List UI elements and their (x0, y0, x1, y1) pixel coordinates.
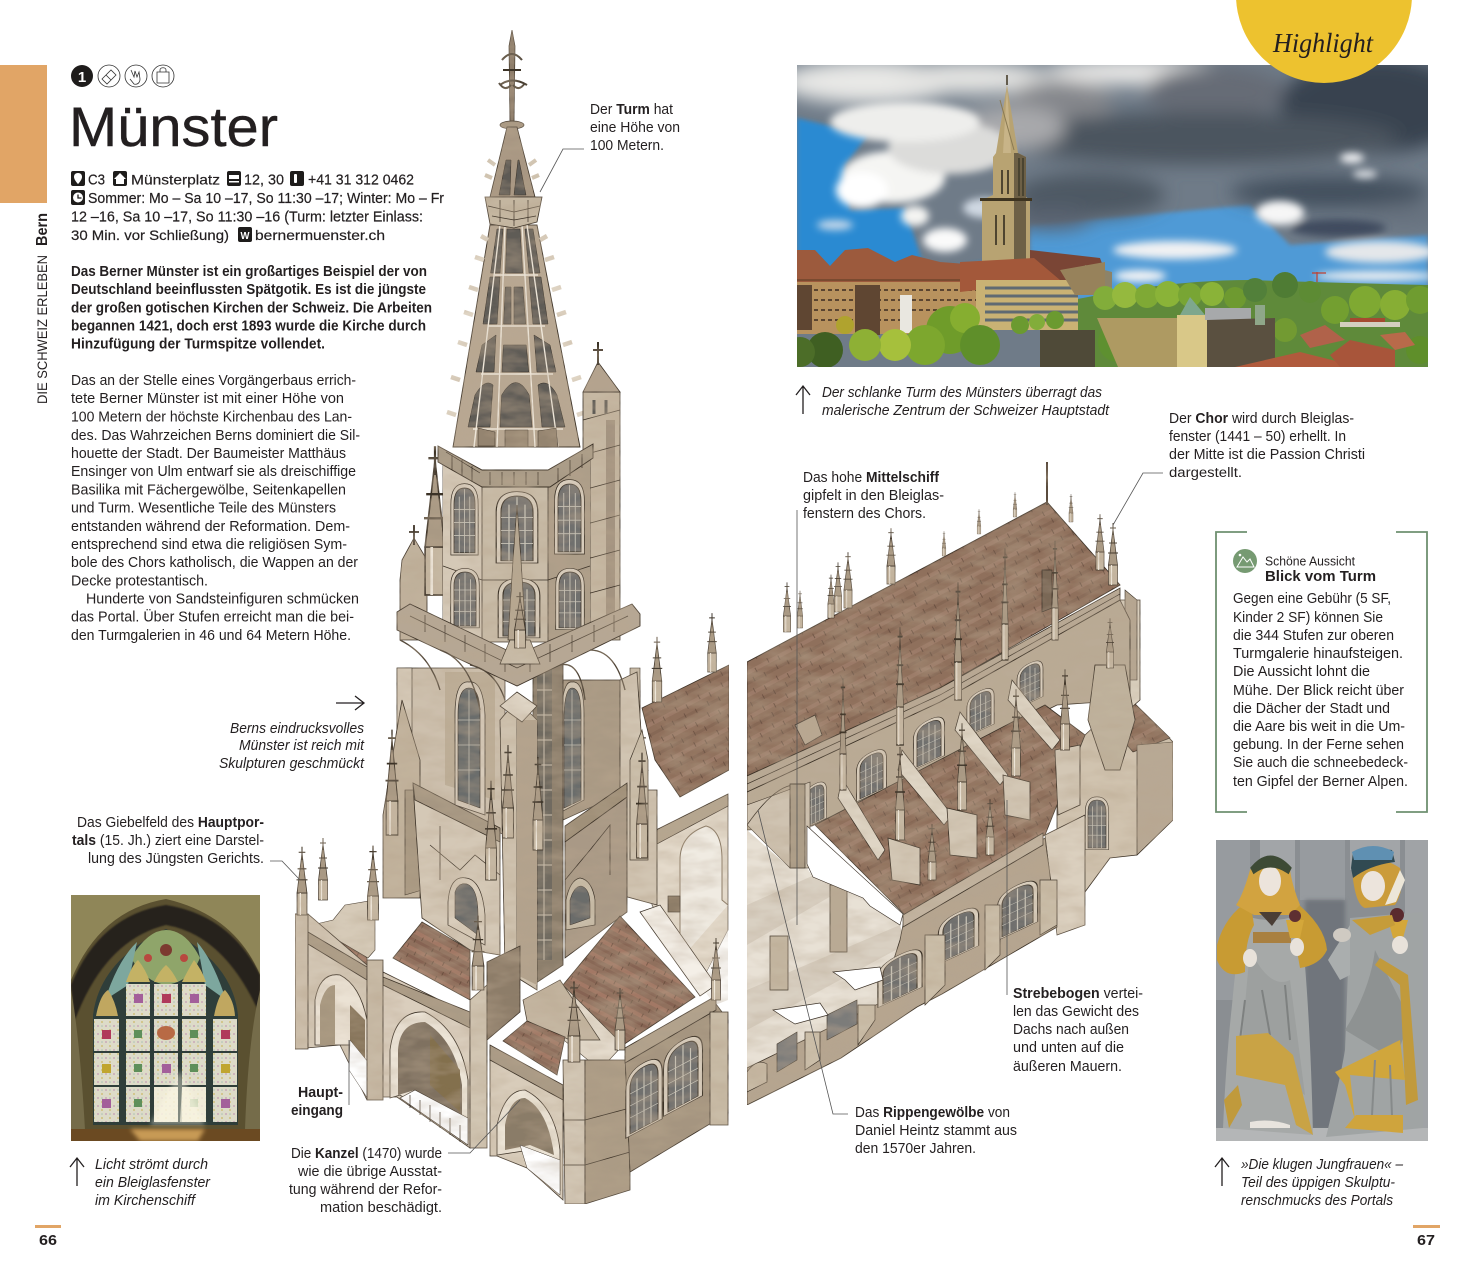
illustration: west tower (295, 30, 729, 1204)
box: view from the tower: die Aare bis weit in die Um- (1233, 719, 1405, 735)
body text: 100 Metern der höchste Kirchenbau des Lan- (71, 410, 352, 426)
label: flying buttresses (1007, 800, 1143, 1075)
flying buttresses and pinnacles (838, 514, 1135, 885)
label: choir: der Mitte ist die Passion Christi (1169, 447, 1365, 463)
interior floor (747, 782, 905, 1075)
body text: Basilika mit Fächergewölbe, Seitenkapellen (71, 482, 346, 498)
photo: stained glass window (71, 895, 260, 1141)
caption: statues: »Die klugen Jungfrauen« – (1241, 1157, 1404, 1173)
body text: houette der Stadt. Der Baumeister Matthäus (71, 446, 346, 462)
body text: tete Berner Münster ist mit einer Höhe von (71, 391, 344, 407)
gallery two (397, 592, 640, 710)
hills and trees (1050, 280, 1428, 367)
clerestory windows (804, 657, 1043, 828)
label: ribbed vault (758, 810, 1017, 1157)
far left bay (295, 914, 395, 1100)
practical information: +41 31 312 0462 (308, 172, 414, 188)
caption: stained glass: im Kirchenschiff (95, 1193, 197, 1209)
label: pulpit: mation beschädigt. (320, 1200, 442, 1216)
caption: stained glass (70, 1157, 211, 1209)
label: ribbed vault: den 1570er Jahren. (855, 1141, 976, 1157)
label: tower height: eine Höhe von (590, 120, 680, 136)
roofs of the porch (312, 900, 716, 1075)
page number right: 67 (1417, 1232, 1435, 1249)
nave roof (747, 462, 1120, 792)
box: view from the tower: Turmgalerie hinaufsteigen. (1233, 646, 1403, 662)
box: view from the tower: Schöne Aussicht (1265, 554, 1355, 568)
caption: statues: renschmucks des Portals (1241, 1193, 1393, 1209)
box: view from the tower (1216, 532, 1427, 812)
caption: stained glass: ein Bleiglasfenster (95, 1175, 211, 1191)
white cut through aisle vault (807, 826, 903, 925)
old town buildings (797, 248, 1105, 335)
practical information: bernermuenster.ch (255, 227, 385, 243)
body text: entstanden während der Reformation. Dem- (71, 519, 350, 535)
label: pulpit: tung während der Refor- (289, 1182, 442, 1198)
label: main entrance: eingang (291, 1103, 343, 1119)
box: view from the tower: Sie auch die schneebedeck- (1233, 755, 1408, 771)
label: pulpit (289, 1100, 520, 1216)
rating and category icons (71, 65, 174, 87)
label: choir: fenster (1441 – 50) erhellt. In (1169, 429, 1346, 445)
box: view from the tower: die Dächer der Stadt und (1233, 701, 1390, 717)
box: view from the tower: ten Gipfel der Berner Alpen. (1233, 774, 1408, 790)
caption: statues: Teil des üppigen Skulptu- (1241, 1175, 1395, 1191)
body text: den Turmgalerien in 46 und 64 Metern Höhe. (71, 628, 351, 644)
illustration: nave (747, 462, 1173, 1105)
practical information: 12, 30 (244, 172, 284, 188)
choir-side wall (625, 938, 728, 1172)
east chapel (1045, 590, 1173, 935)
page number right (1413, 1225, 1440, 1249)
caption: sculptures: Skulpturen geschmückt (219, 756, 365, 772)
clerestory wall (747, 600, 1130, 830)
caption: stained glass: Licht strömt durch (95, 1157, 208, 1173)
finial (499, 30, 527, 129)
intro paragraph: Deutschland beeinflussten Spätgotik. Es ist die jüngste (71, 282, 426, 298)
label: flying buttresses: äußeren Mauern. (1013, 1059, 1122, 1075)
practical information: W (240, 231, 250, 242)
stair turret (583, 342, 620, 640)
lower tower faces (413, 783, 627, 958)
gallery one (438, 444, 593, 487)
label: choir (1113, 411, 1365, 525)
label: flying buttresses: Dachs nach außen (1013, 1022, 1129, 1038)
cathedral tower (980, 75, 1032, 262)
window tracery (93, 929, 238, 1125)
highlight badge (1236, 0, 1412, 83)
sky blue patches (797, 118, 1428, 300)
sidebar vertical label: DIE SCHWEIZ ERLEBEN (34, 255, 50, 404)
box: view from the tower: Kinder 2 SF) können Sie (1233, 610, 1383, 626)
label: pulpit: Die Kanzel (1470) wurde (291, 1146, 442, 1162)
caption: skyline: Der schlanke Turm des Münsters überragt das (822, 385, 1102, 401)
label: tower height: 100 Metern. (590, 138, 664, 154)
intro paragraph: Hinzufügung der Turmspitze vollendet. (71, 336, 325, 352)
label: tower height: Der Turm hat (590, 102, 673, 118)
body text (71, 373, 360, 644)
caption: sculptures (219, 696, 365, 772)
practical information: 12 –16, Sa 10 –17, So 11:30 –16 (Turm: letzter Einlass: (71, 210, 423, 226)
aisle roof (815, 705, 1085, 915)
label: high nave: fenstern des Chors. (803, 506, 926, 522)
caption: sculptures: Münster ist reich mit (239, 738, 365, 754)
intro paragraph: Das Berner Münster ist ein großartiges Beispiel der von (71, 264, 427, 280)
label: flying buttresses: Strebebogen vertei- (1013, 986, 1143, 1002)
title: Münster (69, 95, 278, 158)
label: main entrance: Haupt- (298, 1085, 343, 1101)
octagon storey (443, 458, 590, 642)
clouds (780, 57, 1470, 230)
label: tower height (540, 102, 680, 192)
body text: Ensinger von Ulm entwarf sie als dreischiffige (71, 464, 356, 480)
outer aisle wall (747, 797, 1109, 1105)
trees (785, 272, 1434, 368)
label: main portal tympanum: tals (15. Jh.) ziert eine Darstel- (72, 833, 264, 849)
label: pulpit: wie die übrige Ausstat- (297, 1164, 442, 1180)
label: high nave: Das hohe Mittelschiff (803, 470, 939, 486)
intro paragraph: der großen gotischen Kirchen der Schweiz. Die Arbeiten (71, 300, 432, 316)
page number left: 66 (39, 1232, 57, 1249)
sidebar tab (0, 65, 47, 203)
wood panelling (71, 1129, 260, 1141)
upper square storey (397, 668, 640, 835)
body text: entsprechend sind etwa die religiösen Sym- (71, 537, 347, 553)
practical information (71, 171, 444, 243)
rooftops bottom right (1235, 272, 1415, 367)
outer buttresses (383, 672, 657, 905)
box: view from the tower: Blick vom Turm (1265, 569, 1376, 585)
rating and category icons: 1 (78, 69, 86, 86)
porch walls (295, 838, 728, 1204)
practical information: C3 (88, 172, 105, 188)
highlight badge: Highlight (1272, 28, 1374, 58)
photo: statues of the wise virgins (1216, 840, 1428, 1141)
porch piers (295, 838, 520, 1148)
spire (447, 127, 586, 447)
body text: Hunderte von Sandsteinfiguren schmücken (86, 592, 359, 608)
body text: bole des Chors katholisch, die Wappen an der (71, 555, 358, 571)
body text: und Turm. Wesentliche Teile des Münsters (71, 500, 336, 516)
caption: skyline (796, 385, 1110, 419)
caption: sculptures: Berns eindrucksvolles (230, 721, 364, 737)
label: flying buttresses: und unten auf die (1013, 1040, 1124, 1056)
body text: Das an der Stelle eines Vorgängerbaus errich- (71, 373, 356, 389)
box: view from the tower: gebung. In der Ferne sehen (1233, 737, 1404, 753)
box: view from the tower: Mühe. Der Blick reicht über (1233, 683, 1404, 699)
cut-away vault ribs (773, 967, 883, 1024)
left turret pinnacles (400, 446, 446, 640)
page number left (35, 1225, 61, 1249)
icon: mountain view (1233, 549, 1257, 573)
nave stub behind tower (636, 613, 729, 1005)
label: main portal tympanum: Das Giebelfeld des Hauptpor- (77, 815, 264, 831)
intro paragraph (71, 264, 432, 352)
roofline pinnacles (783, 492, 1118, 632)
central buttress and stair (485, 648, 563, 990)
intro paragraph: begannen 1421, doch erst 1893 wurde die Kirche durch (71, 318, 426, 334)
left statue (1217, 857, 1327, 1135)
label: high nave (797, 470, 944, 925)
label: main portal tympanum: lung des Jüngsten Gerichts. (88, 851, 264, 867)
practical information: Münsterplatz (131, 172, 220, 188)
sidebar vertical label: Bern (34, 213, 51, 246)
body text: das Portal. Über Stufen erreicht man die bei- (71, 608, 354, 626)
label: ribbed vault: Das Rippengewölbe von (855, 1105, 1010, 1121)
nave roof (1030, 250, 1102, 280)
front left bay (490, 1045, 563, 1200)
label: ribbed vault: Daniel Heintz stammt aus (855, 1123, 1017, 1139)
octagon windows (451, 484, 478, 555)
box: view from the tower: Gegen eine Gebühr (5 SF, (1233, 591, 1391, 607)
middle bay (370, 972, 470, 1148)
label: main entrance (291, 1040, 349, 1119)
practical information: Sommer: Mo – Sa 10 –17, So 11:30 –17; Winter: Mo – Fr (88, 191, 444, 207)
label: main portal tympanum (72, 815, 300, 880)
box: view from the tower: die 344 Stufen zur oberen (1233, 628, 1394, 644)
box: view from the tower: Die Aussicht lohnt die (1233, 664, 1370, 680)
window panels (94, 984, 237, 1122)
right statue (1326, 846, 1423, 1137)
practical information: 30 Min. vor Schließung) (71, 227, 229, 243)
caption: statues (1215, 1157, 1404, 1209)
bridge wall and bastion (1040, 297, 1275, 367)
label: choir: Der Chor wird durch Bleiglas- (1169, 411, 1354, 427)
label: high nave: gipfelt in den Bleiglas- (803, 488, 944, 504)
label: choir: dargestellt. (1169, 465, 1242, 480)
front corner pier (563, 981, 630, 1204)
label: flying buttresses: len das Gewicht des (1013, 1004, 1139, 1020)
body text: des. Das Wahrzeichen Berns dominiert die Sil- (71, 428, 360, 444)
photo: Bern skyline with cathedral (797, 65, 1428, 367)
caption: skyline: malerische Zentrum der Schweizer Hauptstadt (822, 403, 1110, 419)
body text: Decke protestantisch. (71, 574, 208, 590)
spire openings (468, 229, 565, 427)
